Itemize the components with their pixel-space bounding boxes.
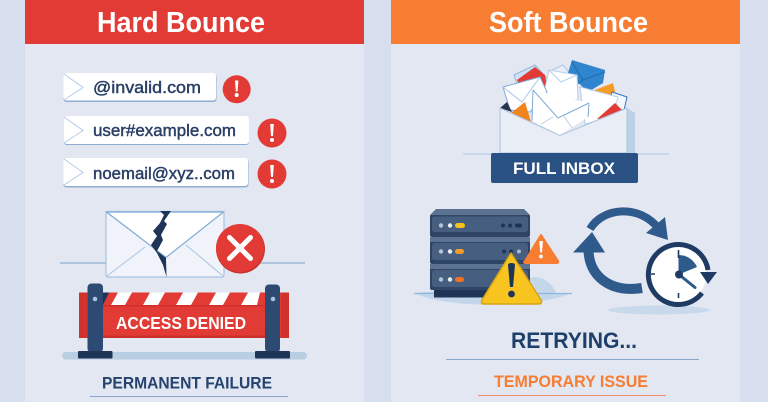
label: permanent failure: PERMANENT FAILURE	[102, 374, 272, 392]
icon: overflowing inbox	[500, 60, 635, 153]
invalid address 1	[64, 73, 216, 102]
label: temporary issue: TEMPORARY ISSUE	[494, 373, 648, 391]
icon: alert 1	[223, 75, 251, 103]
server shadow	[414, 277, 572, 305]
server unit 1	[430, 215, 530, 237]
server unit 2	[430, 237, 530, 264]
panel: hard bounce	[25, 0, 364, 402]
icon: small orange warning	[524, 235, 558, 263]
shelf line	[463, 153, 669, 155]
invalid address 2: user#example.com	[93, 121, 236, 140]
invalid address 1: @invalid.com	[93, 78, 201, 97]
heading: hard bounce: Hard Bounce	[97, 7, 265, 39]
front envelope	[532, 90, 589, 135]
barrier: access denied	[78, 284, 290, 358]
horizon line	[60, 262, 305, 264]
barrier stripes	[111, 292, 260, 305]
invalid address 2	[64, 116, 249, 145]
icon: broken envelope	[106, 211, 224, 277]
heading: hard bounce	[25, 0, 364, 44]
right post	[255, 284, 290, 358]
heading: soft bounce	[391, 0, 740, 44]
clock shadow	[608, 306, 710, 314]
icon: server stack	[430, 209, 530, 298]
barrier shadow	[62, 352, 307, 360]
invalid address 3	[64, 158, 248, 188]
icon: alert 2	[258, 118, 286, 148]
label: full inbox	[491, 153, 638, 183]
heading: soft bounce: Soft Bounce	[489, 7, 648, 39]
inbox body	[500, 108, 627, 153]
barrier: access denied: ACCESS DENIED	[116, 313, 246, 333]
left post	[78, 284, 112, 358]
icon: alert 3	[258, 160, 286, 188]
icon: large yellow warning	[481, 253, 542, 304]
invalid address 3: noemail@xyz..com	[93, 164, 235, 183]
label: full inbox: FULL INBOX	[513, 160, 615, 178]
icon: clock	[648, 245, 717, 305]
icon: red x badge	[216, 224, 265, 274]
panel: soft bounce	[391, 0, 740, 402]
server unit 3	[430, 264, 530, 290]
back envelopes	[500, 60, 627, 124]
label: retrying: RETRYING...	[511, 328, 637, 353]
icon: retry arrows	[573, 211, 668, 289]
